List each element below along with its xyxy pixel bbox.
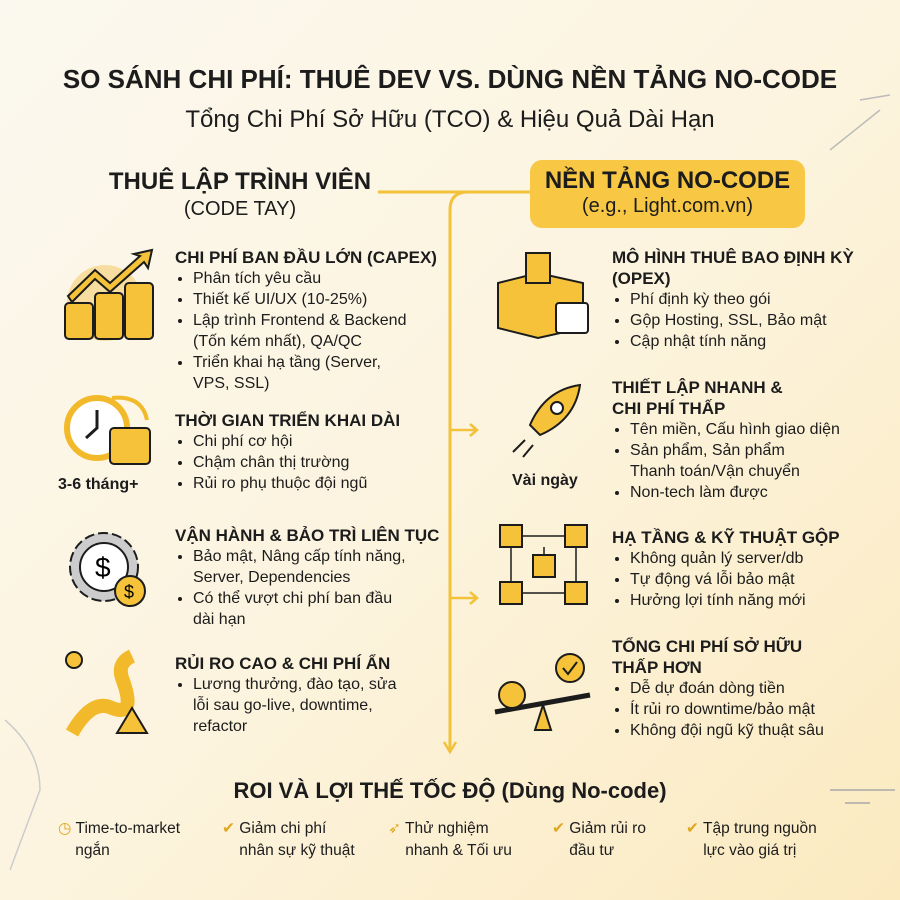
benefit: focus resources: lực vào giá trị xyxy=(703,842,796,859)
label: few days: Vài ngày xyxy=(512,472,578,489)
benefit: reduce risk: ✔ Giảm rủi ro xyxy=(552,820,646,837)
panel: lower tco: Ít rủi ro downtime/bảo mật xyxy=(630,701,815,718)
panel: fast setup: Tên miền, Cấu hình giao diện xyxy=(630,421,840,438)
benefit: reduce risk xyxy=(552,820,646,859)
benefit: reduce risk: đầu tư xyxy=(569,842,614,859)
panel: opex: Cập nhật tính năng xyxy=(630,333,766,350)
panel: hidden costs: refactor xyxy=(193,718,247,735)
panel: infrastructure: HẠ TẦNG & KỸ THUẬT GỘP xyxy=(612,528,840,547)
right heading box xyxy=(530,160,805,228)
panel: infrastructure xyxy=(612,528,840,609)
benefit: time to market: ◷ Time-to-market xyxy=(58,820,180,837)
panel: long deployment: Chi phí cơ hội xyxy=(193,433,292,450)
panel: long deployment: Chậm chân thị trường xyxy=(193,454,349,471)
panel: infrastructure: Hưởng lợi tính năng mới xyxy=(630,592,806,609)
panel: fast setup: Sản phẩm, Sản phẩm xyxy=(630,442,785,459)
panel: infrastructure: Tự động vá lỗi bảo mật xyxy=(630,571,795,588)
panel: fast setup: Non-tech làm được xyxy=(630,484,768,501)
panel: opex: Phí định kỳ theo gói xyxy=(630,291,771,308)
benefit: focus resources xyxy=(686,820,817,859)
panel: long deployment: Rủi ro phụ thuộc đội ngũ xyxy=(193,475,367,492)
subtitle: Tổng Chi Phí Sở Hữu (TCO) & Hiệu Quả Dài Hạn xyxy=(185,106,715,133)
panel: infrastructure: Không quản lý server/db xyxy=(630,550,803,567)
label: 3-6 months: 3-6 tháng+ xyxy=(58,476,138,493)
icon: rocket xyxy=(512,384,582,458)
panel: maintenance xyxy=(175,526,439,628)
panel: maintenance: VẬN HÀNH & BẢO TRÌ LIÊN TỤC xyxy=(175,526,439,545)
panel: capex: VPS, SSL) xyxy=(193,375,269,392)
benefits row xyxy=(58,820,817,859)
panel: hidden costs: lỗi sau go-live, downtime, xyxy=(193,697,373,714)
benefit: fast testing: nhanh & Tối ưu xyxy=(405,842,512,859)
panel: opex: Gộp Hosting, SSL, Bảo mật xyxy=(630,312,827,329)
panel: hidden costs: RỦI RO CAO & CHI PHÍ ẨN xyxy=(175,654,390,673)
icon: box subscription xyxy=(497,252,589,339)
panel: maintenance: Bảo mật, Nâng cấp tính năng, xyxy=(193,548,406,565)
benefit: reduce staff cost xyxy=(222,820,355,859)
icon: coins chart xyxy=(64,248,154,341)
panel: capex: Lập trình Frontend & Backend xyxy=(193,312,406,329)
left heading: THUÊ LẬP TRÌNH VIÊN xyxy=(109,168,371,195)
bottom heading: ROI VÀ LỢI THẾ TỐC ĐỘ (Dùng No-code) xyxy=(233,778,667,803)
panel: opex: MÔ HÌNH THUÊ BAO ĐỊNH KỲ xyxy=(612,248,854,267)
panel: fast setup: Thanh toán/Vận chuyển xyxy=(630,463,800,480)
panel: capex: CHI PHÍ BAN ĐẦU LỚN (CAPEX) xyxy=(175,248,437,267)
benefit: fast testing: ➶ Thử nghiệm xyxy=(388,820,489,837)
panel: opex: (OPEX) xyxy=(612,269,671,288)
title: SO SÁNH CHI PHÍ: THUÊ DEV VS. DÙNG NỀN TẢNG NO-CODE xyxy=(63,64,837,94)
benefit: time to market xyxy=(58,820,180,859)
panel: maintenance: Có thể vượt chi phí ban đầu xyxy=(193,590,392,607)
panel: fast setup xyxy=(612,378,840,501)
panel: capex: (Tốn kém nhất), QA/QC xyxy=(193,333,362,350)
icon: gear dollar: $ xyxy=(124,582,134,602)
panel: lower tco: THẤP HƠN xyxy=(612,658,702,677)
panel: lower tco: TỔNG CHI PHÍ SỞ HỮU xyxy=(612,637,802,656)
panel: opex xyxy=(612,248,854,350)
panel: capex xyxy=(175,248,437,392)
icon: clock calendar xyxy=(64,395,151,465)
right heading box: NỀN TẢNG NO-CODE xyxy=(545,167,790,194)
icon: gear dollar xyxy=(69,532,146,607)
benefit: time to market: ngắn xyxy=(75,842,110,859)
icon: gear dollar: $ xyxy=(95,552,111,583)
panel: lower tco: Không đội ngũ kỹ thuật sâu xyxy=(630,722,824,739)
icon: connected cubes xyxy=(499,524,588,605)
right heading box: (e.g., Light.com.vn) xyxy=(582,195,753,217)
panel: hidden costs xyxy=(175,654,397,735)
panel: maintenance: Server, Dependencies xyxy=(193,569,350,586)
benefit: focus resources: ✔ Tập trung nguồn xyxy=(686,820,817,837)
panel: lower tco xyxy=(612,637,824,739)
icon: balance xyxy=(494,653,590,731)
panel: long deployment: THỜI GIAN TRIỂN KHAI DÀI xyxy=(175,411,400,430)
panel: lower tco: Dễ dự đoán dòng tiền xyxy=(630,680,785,697)
icon: road warning xyxy=(65,650,149,736)
panel: fast setup: THIẾT LẬP NHANH & xyxy=(612,378,783,397)
benefit: fast testing xyxy=(388,820,512,859)
panel: capex: Phân tích yêu cầu xyxy=(193,270,321,287)
panel: capex: Thiết kế UI/UX (10-25%) xyxy=(193,291,367,308)
left heading xyxy=(109,167,371,220)
left heading: (CODE TAY) xyxy=(184,198,296,220)
benefit: reduce staff cost: nhân sự kỹ thuật xyxy=(239,842,355,859)
panel: long deployment xyxy=(175,411,400,492)
panel: maintenance: dài hạn xyxy=(193,611,246,628)
panel: fast setup: CHI PHÍ THẤP xyxy=(612,399,725,418)
panel: hidden costs: Lương thưởng, đào tạo, sửa xyxy=(193,676,396,693)
benefit: reduce staff cost: ✔ Giảm chi phí xyxy=(222,820,326,837)
panel: capex: Triển khai hạ tầng (Server, xyxy=(193,354,381,371)
